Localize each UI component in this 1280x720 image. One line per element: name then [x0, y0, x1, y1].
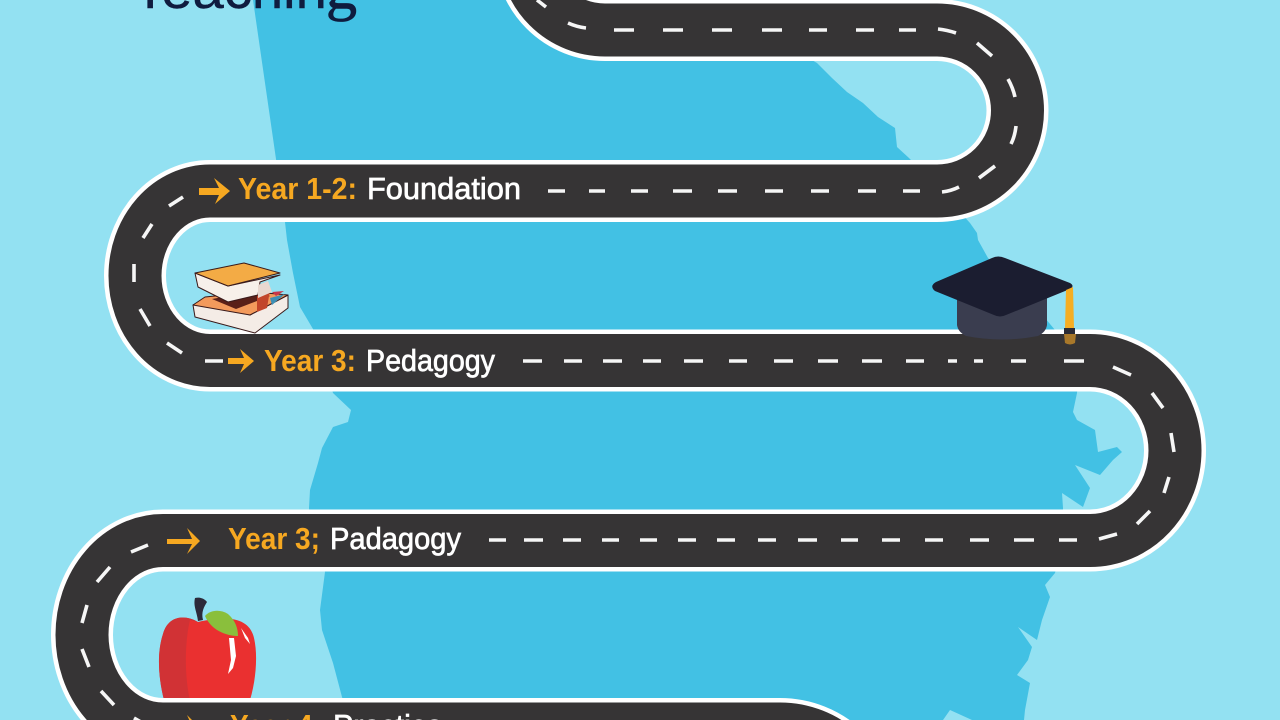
label: Year 4 Practice [167, 708, 443, 720]
label: Year 1-2 Foundation: Year 1-2: [238, 171, 357, 206]
label: Year 3 Pedagogy [228, 343, 495, 378]
label: Year 3 Padagogy: Year 3; [228, 521, 320, 556]
icon: apple [159, 598, 256, 700]
map of Georgia silhouette [253, 0, 1122, 720]
label: Year 3 Padagogy: Padagogy [330, 521, 461, 556]
icon: graduation cap [932, 256, 1076, 344]
label: Year 3 Pedagogy: Year 3: [264, 343, 356, 378]
label: Year 3 Padagogy [167, 521, 461, 556]
label: Year 1-2 Foundation [199, 171, 521, 206]
icon: stacked books [193, 263, 288, 333]
label: Year 1-2 Foundation: Foundation [367, 171, 521, 206]
label: Year 3 Pedagogy: Pedagogy [366, 343, 495, 378]
